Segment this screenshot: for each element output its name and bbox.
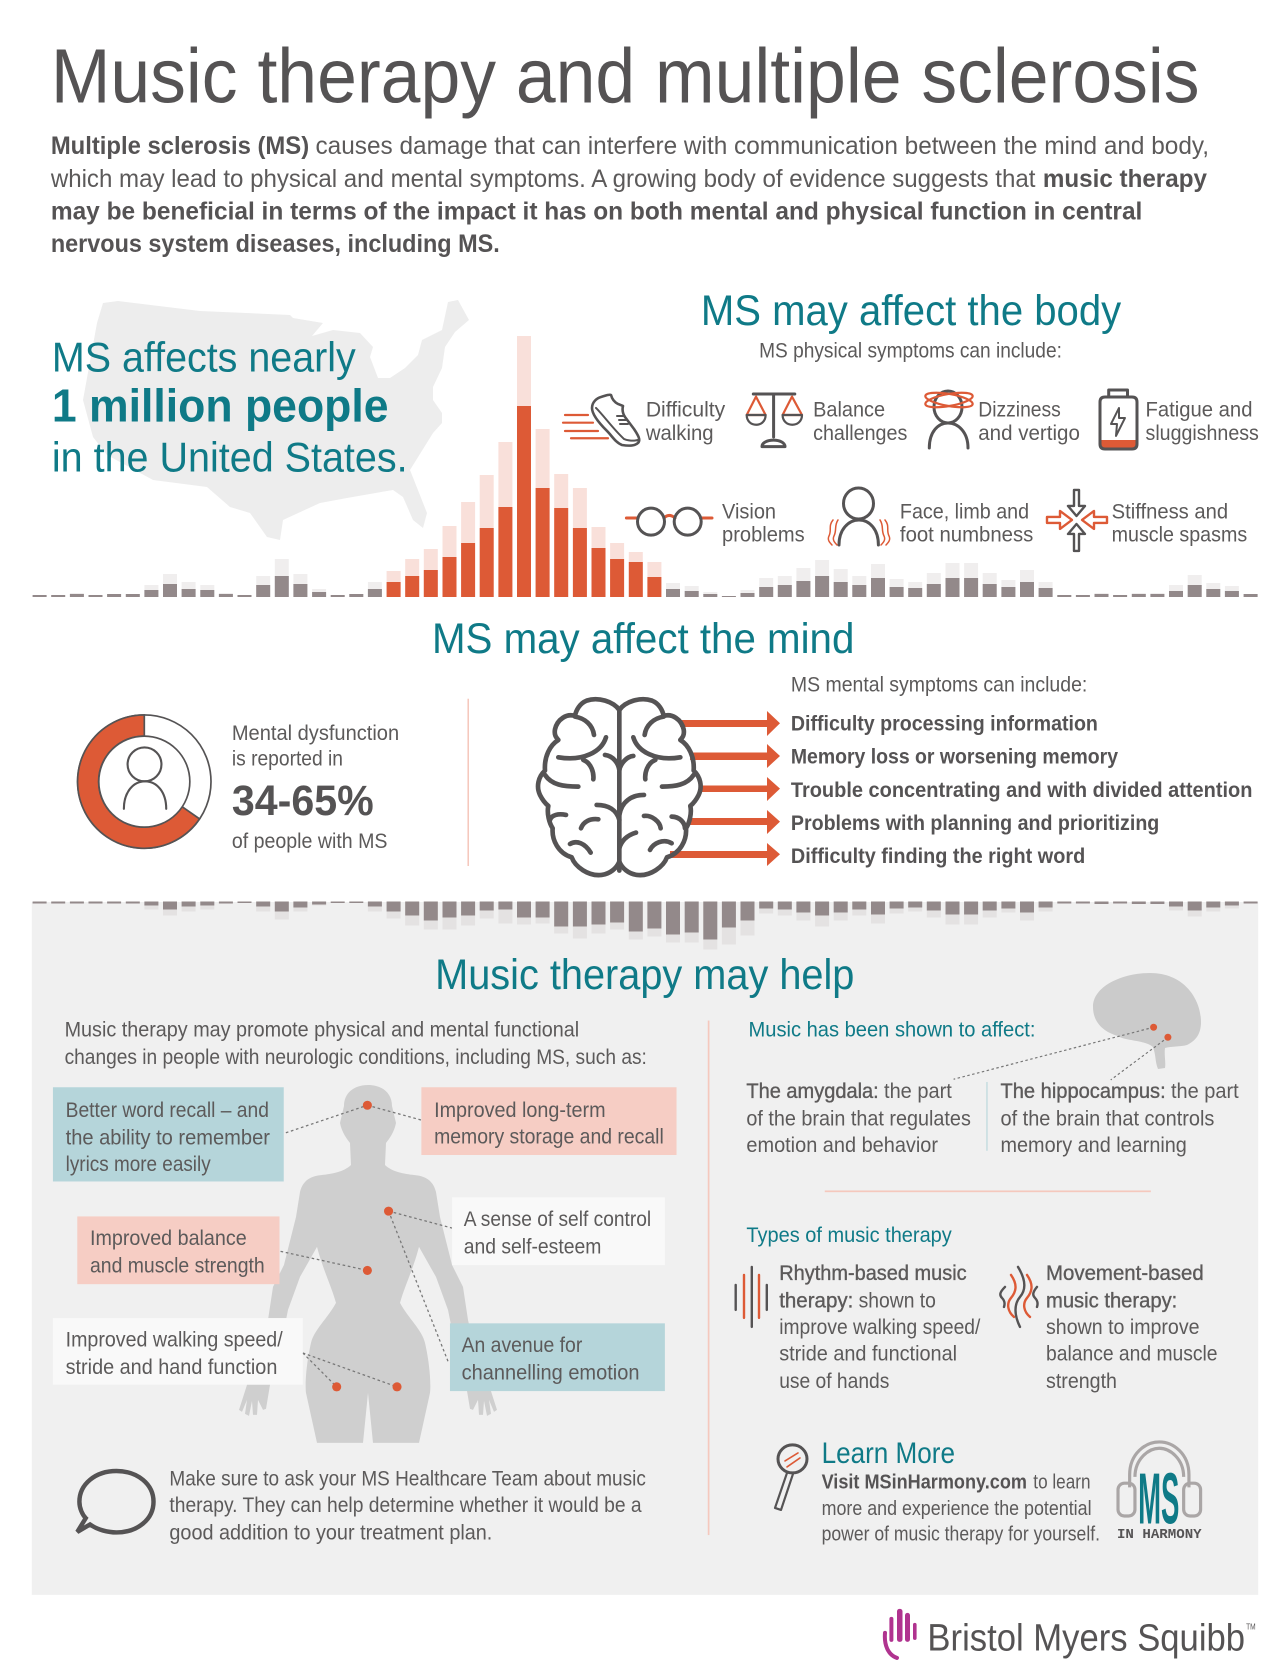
- callout: channelling emotion: An avenue for: [462, 1334, 582, 1357]
- callout: better word recall: [53, 1087, 284, 1181]
- text: dizziness and vertigo: and vertigo: [978, 422, 1080, 445]
- learn more: Learn More: [822, 1437, 955, 1470]
- panel: music therapy may help: [32, 902, 1258, 1595]
- text: ask your healthcare team: good addition to your treatment plan.: [169, 1521, 492, 1544]
- text: vision problems: problems: [722, 524, 805, 547]
- text: face, limb and foot numbness: Face, limb and: [900, 501, 1029, 524]
- bar chart: top waveform: [33, 336, 1258, 597]
- title: Music therapy and multiple sclerosis: [51, 34, 1200, 120]
- text: movement-based music therapy: balance and muscle: [1046, 1342, 1218, 1365]
- brain callout lines and dots: [954, 1024, 1171, 1080]
- orange bars dark: [387, 406, 661, 597]
- subheading: types of music therapy: Types of music therapy: [746, 1224, 952, 1247]
- intro paragraph: Multiple sclerosis (MS): [51, 132, 309, 160]
- stat: mental dysfunction: 34-65%: [232, 777, 374, 824]
- text: stiffness and muscle spasms: muscle spasms: [1112, 524, 1247, 547]
- intro paragraph: may be beneficial in terms of the impact it has on both mental and physical function in central: [51, 198, 1142, 226]
- stat: MS affects nearly 1 million people: in the United States.: [52, 435, 408, 481]
- heading: MS may affect the body: MS may affect the body: [701, 287, 1122, 334]
- stat: mental dysfunction: [232, 722, 399, 853]
- text: the amygdala: The amygdala:: [746, 1080, 879, 1103]
- callout: long-term memory: [421, 1087, 677, 1155]
- icon: speech bubble: [77, 1471, 154, 1532]
- callout: self control: [452, 1197, 665, 1265]
- text: movement-based music therapy: shown to improve: [1046, 1316, 1200, 1339]
- stat: mental dysfunction: Mental dysfunction: [232, 722, 399, 745]
- list: mental symptoms: Difficulty processing information: [791, 712, 1098, 735]
- callout: long-term memory: Improved long-term: [434, 1099, 606, 1122]
- text: difficulty walking: Difficulty: [646, 399, 726, 422]
- callout: walking speed: stride and hand function: [66, 1356, 277, 1379]
- stat: MS affects nearly 1 million people: [52, 335, 408, 481]
- stat: mental dysfunction: of people with MS: [232, 830, 387, 853]
- text: balance challenges: Balance: [813, 399, 885, 422]
- text: rhythm-based music therapy: stride and functional: [779, 1342, 957, 1365]
- intro paragraph: music therapy: [1043, 165, 1207, 193]
- grey bars light: [33, 559, 1258, 597]
- callout: better word recall: Better word recall – and: [66, 1099, 269, 1122]
- body dots: [332, 1101, 402, 1391]
- icon: shoe with motion lines: [563, 395, 639, 446]
- list: mental symptoms: Problems with planning and prioritizing: [791, 812, 1159, 835]
- text: rhythm-based music therapy: Rhythm-based music: [779, 1262, 967, 1285]
- stat: MS affects nearly 1 million people: 1 million people: [52, 379, 389, 431]
- callout: channelling emotion: [450, 1323, 665, 1391]
- text: ask your healthcare team: Make sure to ask your MS Healthcare Team about music: [169, 1467, 646, 1490]
- text: stiffness and muscle spasms: Stiffness and: [1112, 501, 1228, 524]
- map of the United States: [83, 300, 469, 540]
- logo: Bristol Myers Squibb: TM: [1246, 1621, 1256, 1631]
- dark bars: [33, 901, 1258, 939]
- intro paragraph: causes damage that can interfere with communication between the mind and body,: [316, 132, 1209, 160]
- text: movement-based music therapy: strength: [1046, 1370, 1117, 1393]
- orange bars light: [387, 336, 661, 597]
- text: vision problems: [722, 501, 805, 547]
- intro paragraph: [50, 132, 1209, 258]
- text: face, limb and foot numbness: [900, 501, 1033, 547]
- body silhouette: [239, 1085, 497, 1443]
- learn more: Visit MSinHarmony.com: [822, 1471, 1027, 1493]
- callout: self control: A sense of self control: [464, 1208, 651, 1231]
- logo: MS in Harmony: IN HARMONY: [1117, 1528, 1202, 1543]
- icon: movement waves: [1000, 1267, 1038, 1327]
- icon: side brain: [1093, 973, 1201, 1069]
- callout: walking speed: Improved walking speed/: [66, 1329, 283, 1352]
- text: rhythm-based music therapy: improve walking speed/: [779, 1316, 980, 1339]
- learn more: to learn: [1033, 1471, 1090, 1493]
- icon: magnifying glass: [775, 1445, 807, 1510]
- icon: low battery: [1100, 390, 1137, 449]
- text: neurologic changes intro: [65, 1018, 647, 1069]
- logo: MS in Harmony: MS: [1138, 1459, 1179, 1539]
- text: difficulty walking: walking: [645, 422, 714, 445]
- text: the amygdala: of the brain that regulates: [746, 1107, 971, 1130]
- list: mental symptoms: Trouble concentrating and with divided attention: [791, 779, 1252, 802]
- callout: better word recall: the ability to remember: [66, 1126, 270, 1149]
- learn more: power of music therapy for yourself.: [822, 1523, 1100, 1545]
- heading: MS may affect the mind: MS may affect the mind: [432, 615, 854, 662]
- logo: MS in Harmony: [1117, 1442, 1202, 1543]
- bar chart: inverted waveform: [33, 901, 1258, 949]
- text: ask your healthcare team: [169, 1467, 646, 1544]
- stat: MS affects nearly 1 million people: MS affects nearly: [52, 335, 356, 381]
- icon: brain: [538, 699, 701, 875]
- icon: dizzy person: [924, 390, 974, 448]
- icon: rhythm bars: [736, 1267, 767, 1327]
- text: the amygdala: [746, 1080, 971, 1157]
- text: dizziness and vertigo: Dizziness: [978, 399, 1061, 422]
- subheading: music has been shown to affect: Music has been shown to affect:: [749, 1018, 1035, 1041]
- text: movement-based music therapy: [1046, 1262, 1218, 1393]
- text: rhythm-based music therapy: therapy:: [779, 1289, 853, 1312]
- icon: balance scale: [747, 394, 802, 447]
- text: the hippocampus: memory and learning: [1000, 1134, 1187, 1157]
- subheading: physical symptoms: MS physical symptoms can include:: [759, 339, 1062, 362]
- text: dizziness and vertigo: [978, 399, 1080, 445]
- icon: person with numbness: [828, 488, 890, 545]
- stat: mental dysfunction: is reported in: [232, 747, 343, 770]
- heading: music therapy may help: Music therapy may help: [435, 951, 854, 998]
- text: balance challenges: challenges: [813, 422, 907, 445]
- icon: person: [124, 747, 166, 809]
- list: mental symptoms: [791, 712, 1252, 868]
- list: mental symptoms: Difficulty finding the right word: [791, 845, 1085, 868]
- text: neurologic changes intro: Music therapy may promote physical and mental functional: [65, 1018, 579, 1041]
- text: the amygdala: emotion and behavior: [746, 1134, 938, 1157]
- intro paragraph: nervous system diseases, including MS.: [51, 230, 500, 258]
- grey bars dark: [33, 576, 1258, 597]
- text: balance challenges: [813, 399, 907, 445]
- callout: long-term memory: memory storage and recall: [434, 1125, 664, 1148]
- text: the hippocampus: The hippocampus:: [1000, 1080, 1166, 1103]
- arrows from brain: [670, 711, 780, 866]
- text: stiffness and muscle spasms: [1112, 501, 1247, 547]
- callout: walking speed: [53, 1318, 303, 1385]
- text: face, limb and foot numbness: foot numbness: [900, 524, 1033, 547]
- callout: self control: and self-esteem: [464, 1235, 601, 1258]
- callout: balance and muscle strength: and muscle strength: [90, 1255, 265, 1278]
- list: mental symptoms: Memory loss or worsening memory: [791, 745, 1118, 768]
- text: movement-based music therapy: music therapy:: [1046, 1289, 1177, 1312]
- callout: better word recall: lyrics more easily: [66, 1153, 211, 1176]
- callout: balance and muscle strength: Improved balance: [90, 1227, 247, 1250]
- donut chart: 34-65%: [78, 715, 211, 848]
- text: rhythm-based music therapy: use of hands: [779, 1370, 889, 1393]
- text: vision problems: Vision: [722, 501, 776, 524]
- text: the hippocampus: of the brain that controls: [1000, 1107, 1214, 1130]
- callout lines: [281, 1105, 452, 1387]
- text: fatigue and sluggishness: sluggishness: [1146, 422, 1259, 445]
- text: the hippocampus: the part: [1171, 1080, 1239, 1103]
- subheading: mental symptoms: MS mental symptoms can include:: [791, 673, 1087, 696]
- light bars: [144, 901, 1239, 949]
- text: rhythm-based music therapy: [779, 1262, 980, 1393]
- text: the amygdala: the part: [884, 1080, 952, 1103]
- text: difficulty walking: [645, 399, 726, 445]
- text: ask your healthcare team: therapy. They can help determine whether it would be a: [169, 1494, 642, 1517]
- learn more: [822, 1437, 1100, 1545]
- text: fatigue and sluggishness: Fatigue and: [1146, 399, 1252, 422]
- icon: purple hand: [885, 1609, 917, 1658]
- callout: balance and muscle strength: [77, 1216, 280, 1284]
- intro paragraph: which may lead to physical and mental symptoms. A growing body of evidence suggests that: [50, 165, 1036, 193]
- text: fatigue and sluggishness: [1146, 399, 1259, 445]
- callout: channelling emotion: channelling emotion: [462, 1361, 639, 1384]
- text: rhythm-based music therapy: shown to: [859, 1289, 936, 1312]
- text: neurologic changes intro: changes in people with neurologic conditions, including MS, such as:: [65, 1046, 647, 1069]
- learn more: more and experience the potential: [822, 1498, 1092, 1520]
- icon: glasses: [626, 508, 712, 535]
- logo: Bristol Myers Squibb: Bristol Myers Squibb: [927, 1617, 1245, 1659]
- icon: compressing arrows: [1047, 490, 1107, 551]
- text: movement-based music therapy: Movement-based: [1046, 1262, 1204, 1285]
- text: the hippocampus: [1000, 1080, 1239, 1157]
